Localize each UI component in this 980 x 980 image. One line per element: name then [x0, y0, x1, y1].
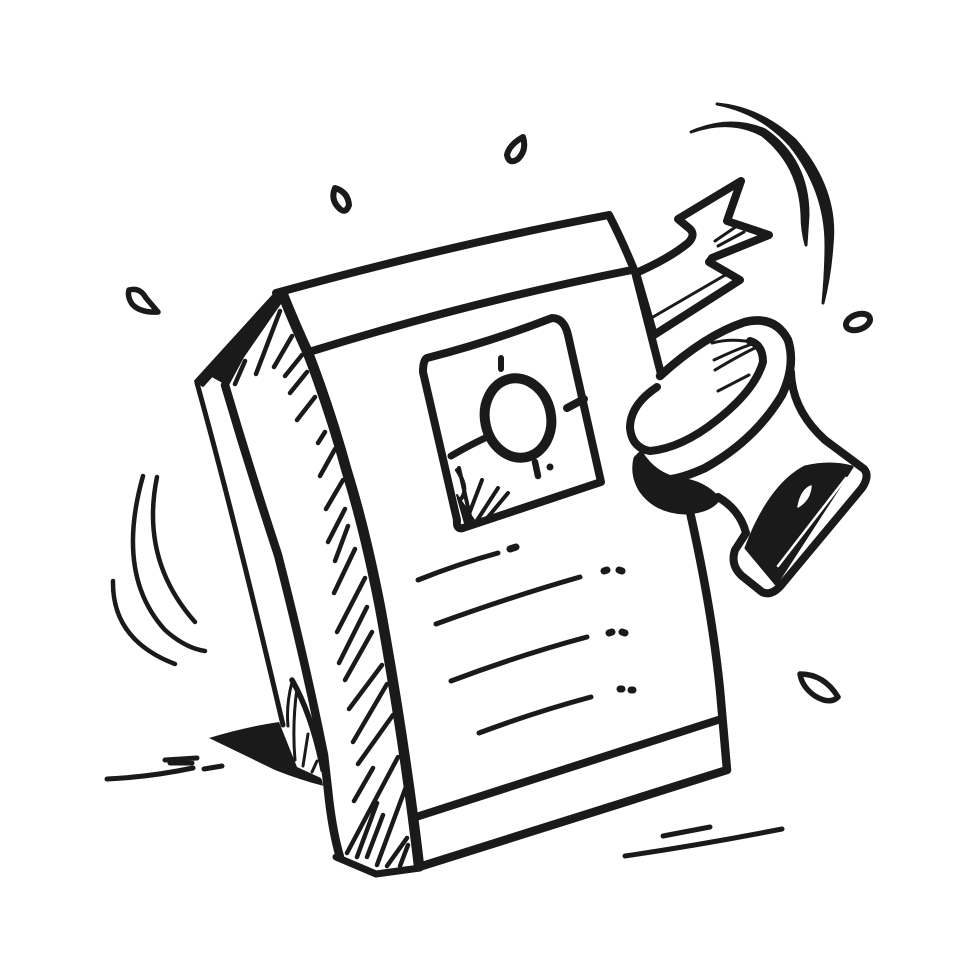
shadow under book	[209, 722, 324, 786]
stamp black collar	[634, 452, 719, 513]
stamp	[630, 320, 867, 593]
stamp neck and handle outline	[718, 372, 867, 593]
stamp black grip	[746, 464, 852, 584]
spine	[195, 292, 420, 875]
stamp handle body	[672, 370, 867, 593]
motion arcs left	[113, 476, 205, 664]
front cover	[276, 215, 727, 868]
text lines on cover	[418, 547, 633, 733]
stamp face ellipse	[630, 341, 763, 451]
droplets	[128, 137, 872, 701]
stamp base ring	[630, 320, 792, 480]
spine hatching	[235, 311, 408, 866]
book	[195, 215, 727, 875]
ground speed dashes	[107, 758, 782, 856]
ribbon bookmark	[636, 181, 769, 335]
motion arcs top right	[691, 104, 833, 303]
image frame with sun icon	[423, 318, 601, 528]
